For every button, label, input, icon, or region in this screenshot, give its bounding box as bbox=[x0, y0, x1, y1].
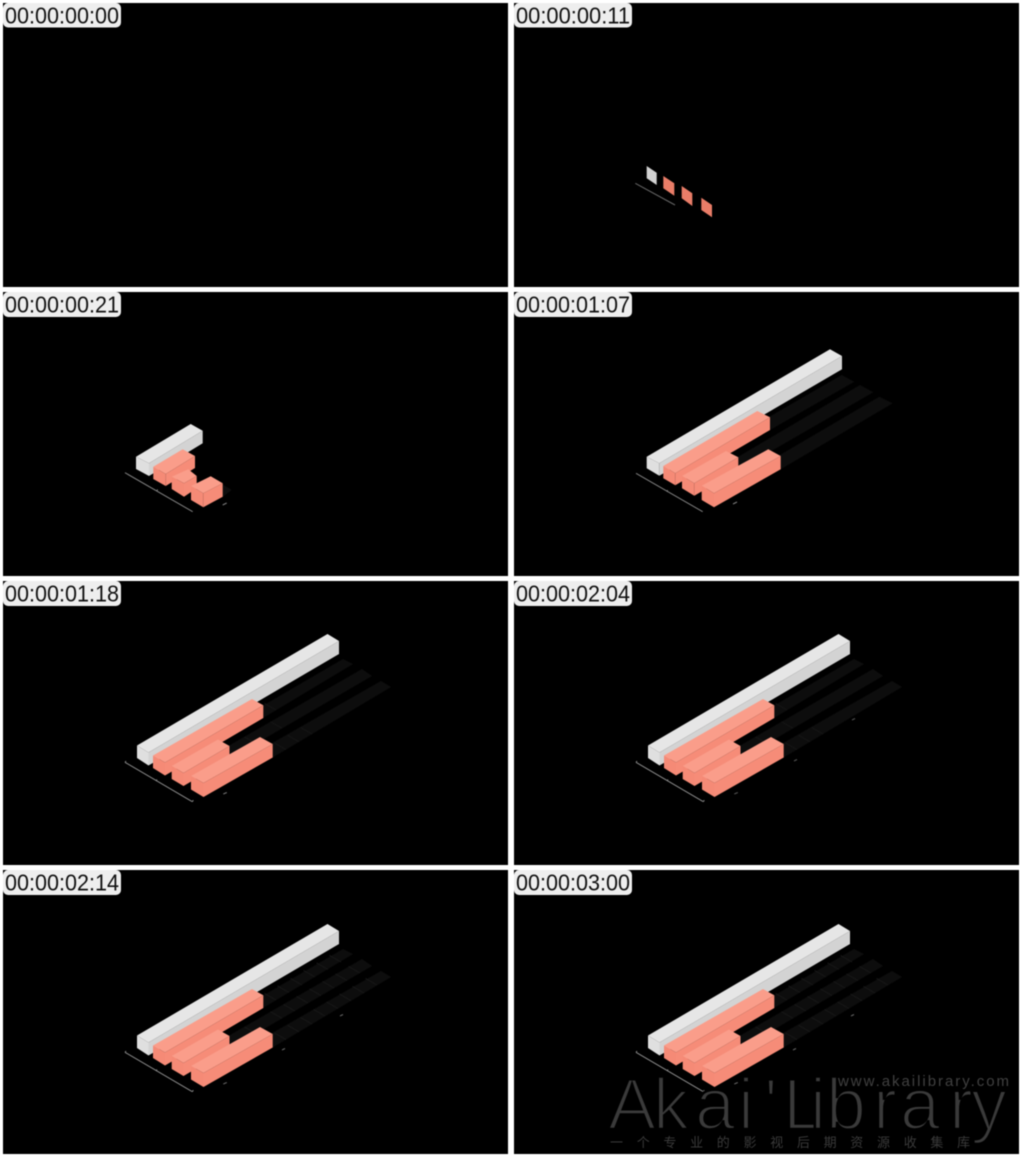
white bar bbox=[648, 924, 850, 1056]
salmon bar 3 bbox=[702, 449, 781, 507]
axis line bbox=[635, 183, 675, 205]
timestamp: 00:00:02:04: 00:00:02:04 bbox=[516, 580, 630, 606]
salmon bar 2 bbox=[172, 1030, 230, 1076]
floor tracks bbox=[218, 949, 391, 1049]
salmon bar 3 bbox=[191, 737, 273, 797]
frame: 00:00:01:18 bbox=[3, 580, 508, 865]
white bar bbox=[136, 424, 203, 476]
frame: 00:00:02:04 bbox=[514, 580, 1019, 865]
timestamp: 00:00:01:18: 00:00:01:18 bbox=[5, 580, 119, 606]
axis line bbox=[125, 473, 227, 512]
timestamp: 00:00:01:07: 00:00:01:07 bbox=[516, 292, 630, 318]
watermark: Akai Library logo bbox=[608, 1065, 1009, 1150]
salmon bar 1 bbox=[664, 989, 774, 1066]
track grid lines bbox=[244, 955, 377, 1040]
floor tracks bbox=[726, 375, 893, 470]
salmon bar 1 bbox=[153, 449, 195, 486]
frame: 00:00:00:00 bbox=[3, 2, 508, 287]
salmon bar 2 bbox=[172, 740, 230, 786]
salmon bar 3 bbox=[702, 1027, 784, 1087]
white bar bbox=[137, 634, 339, 766]
salmon bar 2 bbox=[683, 740, 740, 786]
salmon bar 2 bbox=[683, 1030, 740, 1076]
salmon bar 2 bbox=[682, 451, 738, 496]
axis line bbox=[636, 1051, 704, 1092]
salmon bar 3 bbox=[191, 1027, 273, 1087]
axis line bbox=[636, 473, 737, 512]
white bar bbox=[648, 634, 850, 766]
floor tracks bbox=[729, 949, 902, 1049]
white bar start bbox=[647, 166, 657, 185]
white bar bbox=[137, 924, 339, 1056]
track grid lines bbox=[756, 703, 823, 750]
frame: 00:00:01:07 bbox=[514, 292, 1019, 576]
salmon bar 1 start bbox=[663, 176, 674, 196]
floor tracks bbox=[218, 659, 391, 759]
watermark tagline: 一个专业的影视后期资源收集库 bbox=[610, 1135, 984, 1150]
frame: 00:00:02:14 bbox=[3, 870, 508, 1154]
frame: 00:00:00:21 bbox=[3, 292, 508, 576]
salmon bar 1 bbox=[153, 699, 263, 776]
salmon bar 2 start bbox=[682, 186, 692, 206]
axis line bbox=[125, 761, 193, 802]
salmon bar 2 bbox=[172, 469, 197, 497]
watermark url: www.akailibrary.com bbox=[837, 1073, 1009, 1090]
salmon bar 1 bbox=[153, 989, 263, 1066]
white bar bbox=[647, 349, 842, 476]
salmon bar 3 bbox=[702, 737, 784, 797]
axis line bbox=[636, 761, 704, 802]
timestamp: 00:00:00:11: 00:00:00:11 bbox=[516, 2, 630, 28]
salmon bar 1 bbox=[663, 411, 770, 485]
axis marks bbox=[223, 1014, 343, 1084]
timestamp: 00:00:00:00: 00:00:00:00 bbox=[5, 2, 119, 28]
track grid lines bbox=[756, 955, 888, 1040]
axis marks bbox=[734, 718, 855, 794]
watermark wordmark: Akai'Library bbox=[608, 1065, 1007, 1145]
axis marks bbox=[734, 1014, 854, 1084]
timestamp: 00:00:03:00: 00:00:03:00 bbox=[516, 870, 630, 896]
axis line bbox=[125, 1051, 193, 1092]
salmon bar 1 bbox=[664, 699, 774, 776]
timestamp: 00:00:00:21: 00:00:00:21 bbox=[5, 292, 119, 318]
axis mark bbox=[223, 792, 227, 794]
timestamp: 00:00:02:14: 00:00:02:14 bbox=[5, 870, 119, 896]
floor tracks bbox=[729, 659, 902, 759]
salmon bar 3 bbox=[191, 476, 223, 507]
track grid lines bbox=[244, 703, 312, 750]
frame: 00:00:03:00 bbox=[514, 870, 1019, 1154]
frame: 00:00:00:11 bbox=[514, 2, 1019, 287]
floor tracks bbox=[200, 478, 232, 497]
salmon bar 3 start bbox=[701, 198, 712, 217]
